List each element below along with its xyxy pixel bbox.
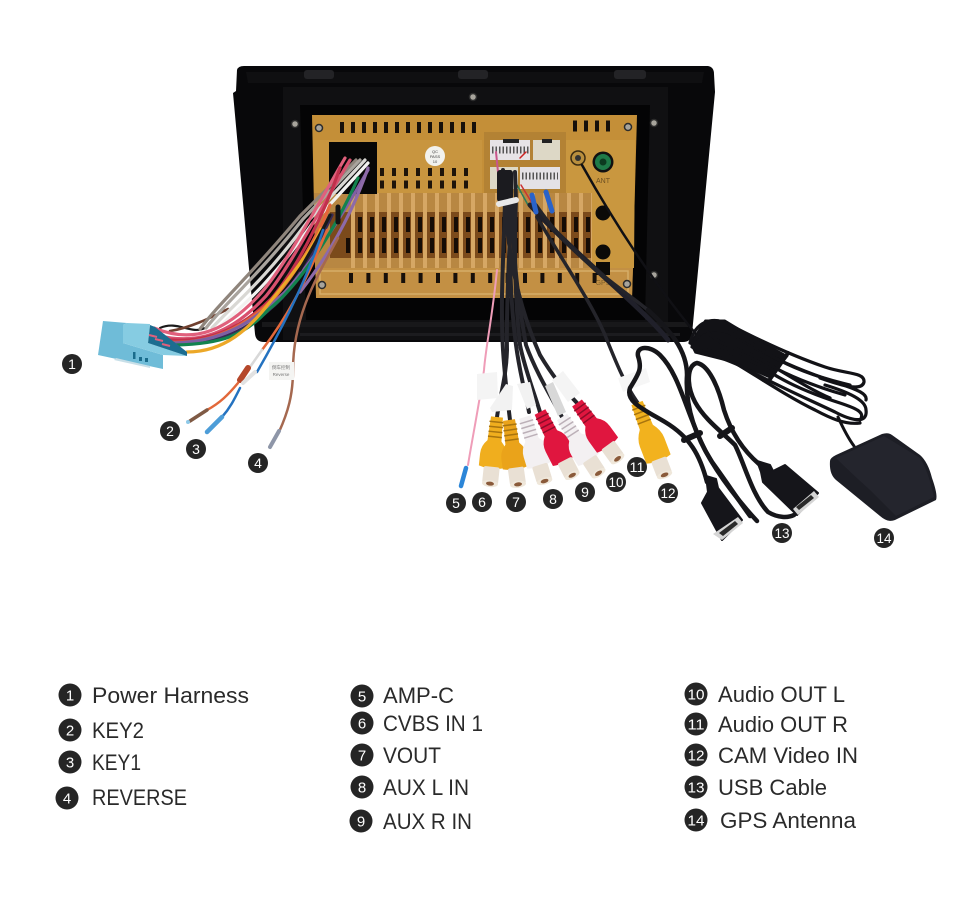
legend item 10: Audio OUT L [718,682,845,707]
legend item 13: 13 [688,780,704,796]
REVERSE wire [269,238,338,447]
REVERSE wire: Reverse [273,372,290,377]
RCA plug: white 8 [513,413,558,488]
USB plug left [702,476,743,540]
REVERSE wire: 倒车控制 [272,364,290,371]
QC sticker: QC [432,149,438,154]
callout 3: 3 [192,441,200,457]
RCA plug: yellow 7 [496,418,531,490]
callout 7: 7 [512,494,520,510]
fin recess [330,212,592,258]
RCA plug: camera yellow 12 [625,398,678,483]
legend item 14: 14 [688,812,704,830]
legend item 11: Audio OUT R [718,712,848,737]
legend item 9: AUX R IN [383,809,472,834]
GPS lead [582,165,705,345]
legend item 5: 5 [358,688,366,706]
legend item 5: AMP-C [383,683,454,708]
callout 6 [472,492,492,512]
callout 5: 5 [452,495,460,511]
legend item 2: 2 [66,722,74,740]
AMP-C wire [461,270,498,486]
screws [292,94,658,288]
legend item 4: 4 [63,790,71,808]
legend item 2: KEY2 [92,718,144,743]
camera cable [537,217,638,403]
callout 10: 10 [608,474,624,490]
callout 2 [160,421,180,441]
legend item 13: USB Cable [718,775,827,800]
white multi-pin connectors [490,139,560,205]
ANT socket and holes: ANT [596,178,611,185]
legend item 6: 6 [358,716,366,732]
legend item 9 [350,809,472,834]
legend item 6: CVBS IN 1 [383,711,483,736]
legend item 12: 12 [688,748,704,764]
KEY2 wire [186,230,327,424]
QC sticker [425,146,445,166]
legend item 8 [350,775,469,800]
callout 4: 4 [254,455,262,471]
power harness wires [154,158,368,352]
callout 7 [506,492,526,512]
callout 5 [446,493,466,513]
panel feed [648,310,750,516]
legend item 3: KEY1 [92,750,141,775]
legend item 3 [58,750,141,775]
callout 8 [543,489,563,509]
RCA plug: red 11 [566,395,630,469]
callout 1: 1 [68,356,76,372]
callout 1 [62,354,82,374]
callout 14 [874,528,894,548]
callout 9 [575,482,595,502]
ANT socket and holes [571,151,614,287]
legend [56,682,858,834]
GPS antenna puck [830,433,936,521]
USB plug right [757,461,819,515]
callout 6: 6 [478,494,486,510]
callout 11: 11 [630,459,645,475]
callout 13 [772,523,792,543]
callout 14: 14 [876,530,892,546]
left loop [629,348,757,521]
callout 9: 9 [581,484,589,500]
callout 11 [627,457,647,477]
RCA plug: red 9 [528,406,585,484]
legend item 7: 7 [358,748,366,764]
gold metal chassis [312,115,637,298]
legend item 4: REVERSE [92,785,187,810]
legend item 12: CAM Video IN [718,743,858,768]
cooling fins [351,193,592,268]
QC sticker: PASS [430,154,441,159]
black bezel frame [233,66,715,342]
callout 3 [186,439,206,459]
callout numbers on the photo [62,354,894,548]
legend item 14: GPS Antenna [720,808,857,833]
KEY1 wire [207,230,323,432]
legend item 9: 9 [357,814,365,830]
legend item 4 [56,785,187,810]
legend item 8: 8 [358,780,366,796]
USB cables [629,310,794,521]
legend item 1: Power Harness [92,683,249,708]
legend item 10: 10 [688,686,704,704]
legend item 1: 1 [66,688,74,704]
RCA plug: yellow 6 [477,416,510,488]
legend item 8: AUX L IN [383,775,469,800]
thick USB feed [530,205,668,340]
cable straps [684,433,700,440]
callout 12 [658,483,678,503]
callout 8: 8 [549,491,557,507]
power harness connector [98,321,187,369]
legend item 11: 11 [688,716,704,734]
legend item 5 [350,683,454,708]
AV cable bundle [497,170,668,420]
callout 10 [606,472,626,492]
RCA plug: white 10 [551,410,611,483]
right loop [689,363,794,517]
callout 4 [248,453,268,473]
head unit rear panel [233,66,715,342]
legend item 3: 3 [66,754,74,772]
legend item 7 [350,743,441,768]
vent slots [340,122,483,133]
callout 2: 2 [166,423,174,439]
ANT socket and holes: GPS [596,280,611,287]
power socket [329,142,377,194]
callout 12: 12 [660,485,676,501]
legend item 2 [58,718,144,743]
RCA labels [490,368,650,416]
QC sticker: 10 [433,159,438,164]
legend item 7: VOUT [383,743,441,768]
GPS cable coil [690,320,866,446]
callout 13: 13 [774,525,790,541]
